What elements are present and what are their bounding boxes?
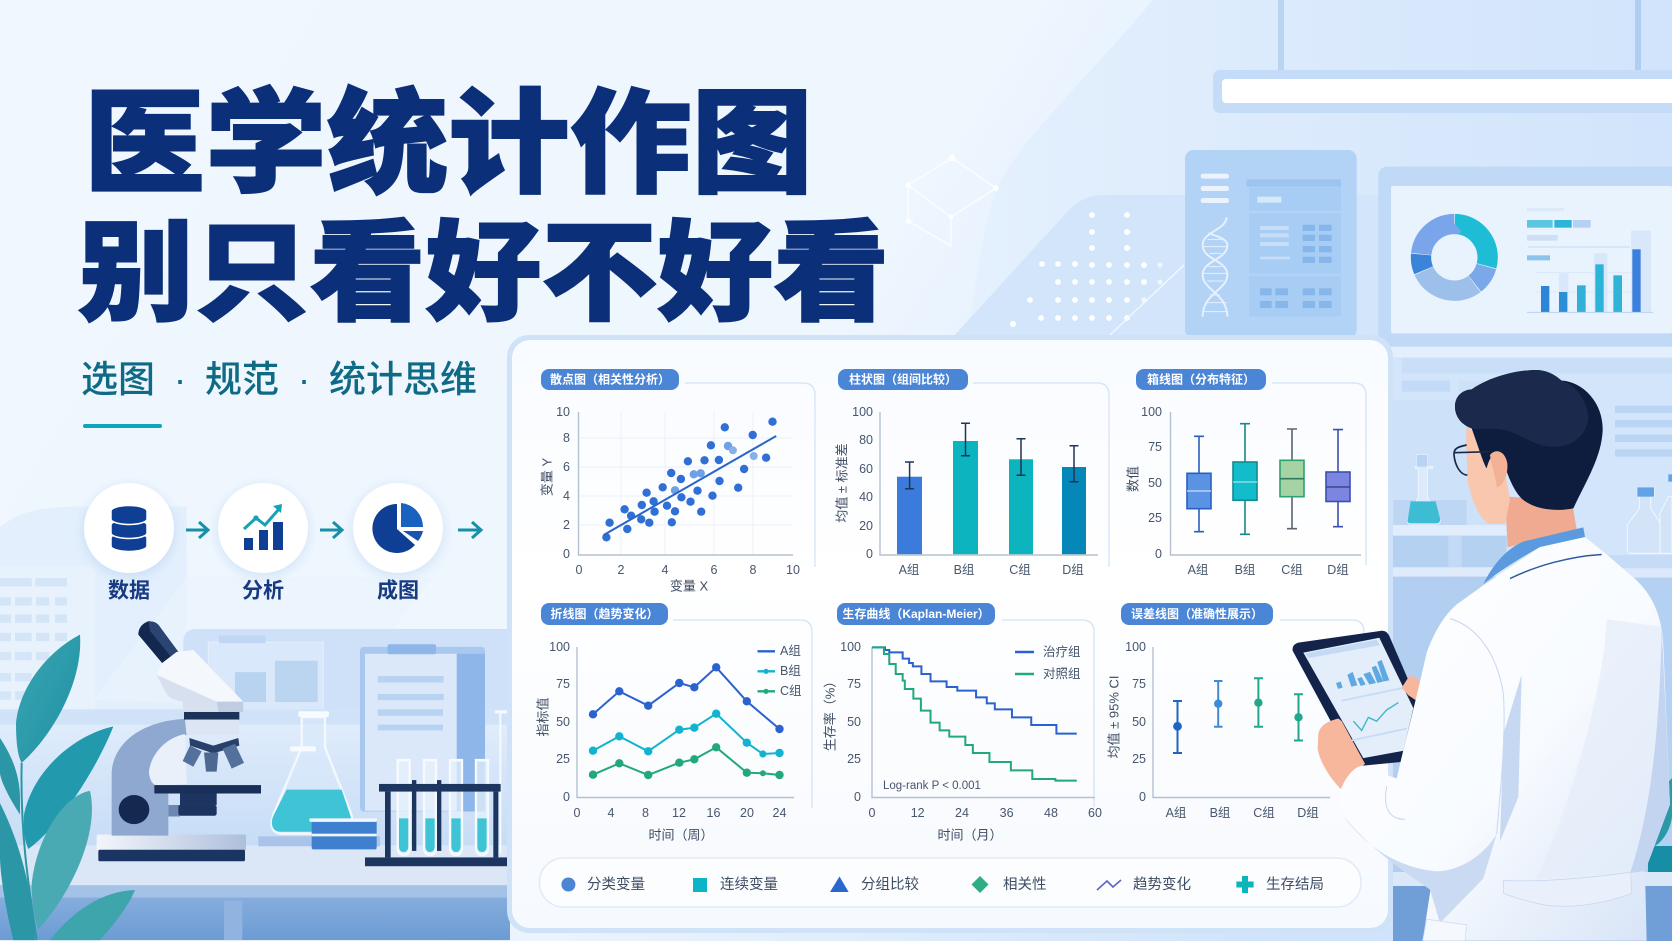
subtitle: 规范 bbox=[205, 359, 279, 400]
tag: bar: 柱状图（组间比较） bbox=[849, 372, 957, 386]
legend: correlation bbox=[972, 876, 1046, 893]
label: analysis: 分析 bbox=[242, 580, 284, 602]
icon: database bbox=[84, 483, 174, 573]
chart: error bar plot: A组 bbox=[1166, 806, 1186, 820]
legend: KM: 对照组 bbox=[1043, 667, 1081, 681]
background monitor with donut and bars bbox=[1378, 167, 1672, 347]
chart: bar chart: C组 bbox=[1009, 563, 1031, 577]
chart: line chart: 时间（周） bbox=[648, 828, 714, 842]
title: 别只看好不好看 bbox=[78, 212, 889, 334]
right wall backdrop bbox=[1390, 340, 1672, 878]
chart: Kaplan-Meier survival curve: 48 bbox=[1044, 806, 1058, 820]
legend: KM: 治疗组 bbox=[1043, 645, 1081, 659]
subtitle: 统计思维 bbox=[329, 359, 477, 400]
chart: box plot: C组 bbox=[1281, 563, 1303, 577]
chart: error bar plot: 0 bbox=[1139, 790, 1146, 804]
chart: Kaplan-Meier survival curve: 24 bbox=[955, 806, 969, 820]
scientist illustration bbox=[1293, 370, 1670, 941]
chart: bar chart bbox=[834, 369, 1109, 577]
legend: continuous bbox=[693, 876, 778, 893]
chart: error bar plot: 75 bbox=[1132, 677, 1146, 691]
main chart panel bbox=[507, 335, 1393, 933]
chart: Kaplan-Meier survival curve: 12 bbox=[911, 806, 925, 820]
arrow 1 bbox=[186, 522, 208, 538]
microscope bbox=[97, 621, 261, 861]
chart: Kaplan-Meier survival curve: 60 bbox=[1088, 806, 1102, 820]
tag: KM: 生存曲线（Kaplan-Meier） bbox=[842, 606, 990, 621]
legend: correlation: 相关性 bbox=[1003, 876, 1046, 893]
chart: box plot: 25 bbox=[1148, 511, 1162, 525]
chart: bar chart: D组 bbox=[1062, 563, 1084, 577]
chart: box plot: 0 bbox=[1155, 547, 1162, 561]
chart: bar chart: 100 bbox=[852, 405, 873, 419]
chart: line chart: 8 bbox=[642, 806, 649, 820]
tag: scatter: 散点图（相关性分析） bbox=[550, 372, 670, 386]
head bbox=[1454, 370, 1603, 547]
chart: Kaplan-Meier survival curve: 25 bbox=[847, 752, 861, 766]
legend bar bbox=[540, 858, 1361, 907]
subtitle: 选图 bbox=[81, 359, 155, 400]
chart: box plot: 100 bbox=[1141, 405, 1162, 419]
flask bbox=[272, 711, 352, 834]
hand bbox=[1318, 719, 1365, 790]
title: 医学统计作图 bbox=[84, 81, 813, 207]
legend: line chart bbox=[758, 644, 802, 698]
chart: error bar plot bbox=[1106, 603, 1364, 820]
chart: error bar plot: 均值 ± 95% CI bbox=[1106, 676, 1122, 758]
mini bar chart bbox=[1527, 208, 1653, 312]
chart: line chart: 24 bbox=[773, 806, 786, 820]
chart: bar chart: 0 bbox=[866, 547, 873, 561]
icon: pie chart bbox=[353, 483, 443, 573]
chart: bar chart: 60 bbox=[859, 462, 873, 476]
chart: line chart: 16 bbox=[707, 806, 720, 820]
lab bench illustration bbox=[0, 621, 508, 940]
arrow 3 bbox=[458, 522, 481, 538]
chart: bar chart: B组 bbox=[954, 563, 974, 577]
chart: box plot: A组 bbox=[1188, 563, 1208, 577]
chart: scatter plot: 8 bbox=[750, 563, 757, 577]
tag: bar bbox=[838, 369, 968, 390]
legend: group comparison: 分组比较 bbox=[861, 875, 919, 893]
chart: Kaplan-Meier survival curve: 36 bbox=[1000, 806, 1014, 820]
chart: line chart: 0 bbox=[574, 806, 581, 820]
chart: scatter plot: 变量 Y bbox=[540, 458, 554, 496]
process flow: data, analysis, figure bbox=[84, 483, 481, 602]
chart: bar chart: 20 bbox=[859, 519, 873, 533]
chart: scatter plot: 10 bbox=[786, 563, 800, 577]
tag: scatter bbox=[541, 369, 679, 390]
ceiling lamp bbox=[1213, 0, 1672, 113]
chart: box plot: B组 bbox=[1235, 563, 1255, 577]
legend: line chart: C组 bbox=[780, 684, 802, 698]
chart: bar chart: 均值 ± 标准差 bbox=[834, 443, 850, 523]
legend: trend: 趋势变化 bbox=[1133, 876, 1191, 893]
chart: scatter plot: 0 bbox=[563, 547, 570, 561]
chart: scatter plot: 4 bbox=[662, 563, 669, 577]
donut chart bbox=[1421, 224, 1488, 291]
tag: line bbox=[541, 603, 668, 625]
chart: line chart: 4 bbox=[608, 806, 615, 820]
chart: line chart: 50 bbox=[556, 715, 570, 729]
chart: scatter plot: 变量 X bbox=[670, 578, 708, 594]
chart: Kaplan-Meier survival curve: 75 bbox=[847, 677, 861, 691]
tag: KM bbox=[837, 603, 995, 625]
chart: error bar plot: C组 bbox=[1253, 806, 1275, 820]
chart: scatter plot: 4 bbox=[563, 489, 570, 503]
chart: scatter plot: 2 bbox=[563, 518, 570, 532]
chart: error bar plot: D组 bbox=[1297, 806, 1319, 820]
chart: error bar plot: 25 bbox=[1132, 752, 1146, 766]
chart: scatter plot: 0 bbox=[576, 563, 583, 577]
legend: continuous: 连续变量 bbox=[720, 876, 778, 893]
legend: line chart: A组 bbox=[780, 644, 801, 658]
chart: Kaplan-Meier survival curve: 时间（月） bbox=[937, 828, 1003, 842]
icon: DNA helix bbox=[1203, 217, 1227, 317]
plant leaves bbox=[0, 635, 135, 940]
subtitle underline bbox=[83, 424, 162, 428]
collar bbox=[1483, 527, 1602, 584]
chart: line chart: 指标值 bbox=[536, 697, 550, 737]
bottom counter right bbox=[1393, 778, 1672, 941]
legend: KM bbox=[1015, 645, 1081, 681]
chart: Kaplan-Meier survival curve: 50 bbox=[847, 715, 861, 729]
icon: chart bbox=[218, 483, 308, 573]
lab coat bbox=[1338, 537, 1670, 941]
chart: Kaplan-Meier survival curve: 100 bbox=[840, 640, 861, 654]
legend: survival: 生存结局 bbox=[1266, 876, 1324, 893]
chart: box plot: 50 bbox=[1148, 476, 1162, 490]
decorative cube and dot grid bbox=[905, 155, 1184, 335]
chart: error bar plot: 50 bbox=[1132, 715, 1146, 729]
chart: box plot: 75 bbox=[1148, 440, 1162, 454]
chart: Kaplan-Meier survival curve bbox=[822, 603, 1102, 842]
chart: line chart: 0 bbox=[563, 790, 570, 804]
chart: line chart: 12 bbox=[672, 806, 686, 820]
subtitle: · bbox=[298, 359, 310, 400]
legend: categorical bbox=[561, 876, 645, 893]
chart: box plot bbox=[1126, 369, 1366, 577]
chart: Kaplan-Meier survival curve: Log-rank P < 0.001 bbox=[883, 780, 981, 792]
subtitle bbox=[81, 359, 477, 400]
tag: error: 误差线图（准确性展示） bbox=[1131, 606, 1263, 621]
chart: line chart: 75 bbox=[556, 677, 570, 691]
chart: box plot: 数值 bbox=[1126, 466, 1140, 492]
legend: line chart: B组 bbox=[780, 664, 801, 678]
chart: line chart: 20 bbox=[740, 806, 754, 820]
test tube rack bbox=[365, 710, 508, 866]
label: figure: 成图 bbox=[377, 578, 419, 602]
chart: scatter plot: 2 bbox=[618, 563, 625, 577]
chart: bar chart: 40 bbox=[859, 490, 873, 504]
chart: bar chart: A组 bbox=[899, 563, 919, 577]
chart: Kaplan-Meier survival curve: 0 bbox=[854, 790, 861, 804]
chart: error bar plot: B组 bbox=[1210, 806, 1230, 820]
petri dishes bbox=[258, 818, 380, 849]
tag: error bbox=[1121, 603, 1273, 625]
chart: line chart bbox=[536, 603, 812, 842]
chart: bar chart: 80 bbox=[859, 433, 873, 447]
background DNA tablet panel bbox=[1185, 150, 1357, 338]
chart: scatter plot: 6 bbox=[711, 563, 718, 577]
tag: box: 箱线图（分布特征） bbox=[1147, 372, 1255, 386]
legend: survival bbox=[1236, 876, 1324, 893]
chart: scatter plot bbox=[540, 369, 815, 594]
subtitle: · bbox=[174, 359, 186, 400]
chart: scatter plot: 6 bbox=[563, 460, 570, 474]
clipboard bbox=[360, 644, 485, 811]
chart: box plot: D组 bbox=[1327, 563, 1349, 577]
chart: scatter plot: 10 bbox=[556, 405, 570, 419]
legend: group comparison bbox=[830, 875, 919, 893]
arrow 2 bbox=[320, 522, 342, 538]
legend: categorical: 分类变量 bbox=[587, 876, 645, 893]
tablet bbox=[1293, 631, 1430, 790]
chart: line chart: 100 bbox=[549, 640, 570, 654]
left lab backdrop bbox=[0, 506, 510, 940]
chart: Kaplan-Meier survival curve: 0 bbox=[869, 806, 876, 820]
chart: line chart: 25 bbox=[556, 752, 570, 766]
tag: box bbox=[1136, 369, 1266, 390]
chart: Kaplan-Meier survival curve: 生存率（%） bbox=[822, 675, 838, 751]
tag: line: 折线图（趋势变化） bbox=[550, 606, 659, 621]
chart: scatter plot: 8 bbox=[563, 431, 570, 445]
legend: trend bbox=[1097, 876, 1191, 893]
label: data: 数据 bbox=[108, 580, 150, 602]
title bbox=[78, 81, 889, 334]
chart: error bar plot: 100 bbox=[1125, 640, 1146, 654]
